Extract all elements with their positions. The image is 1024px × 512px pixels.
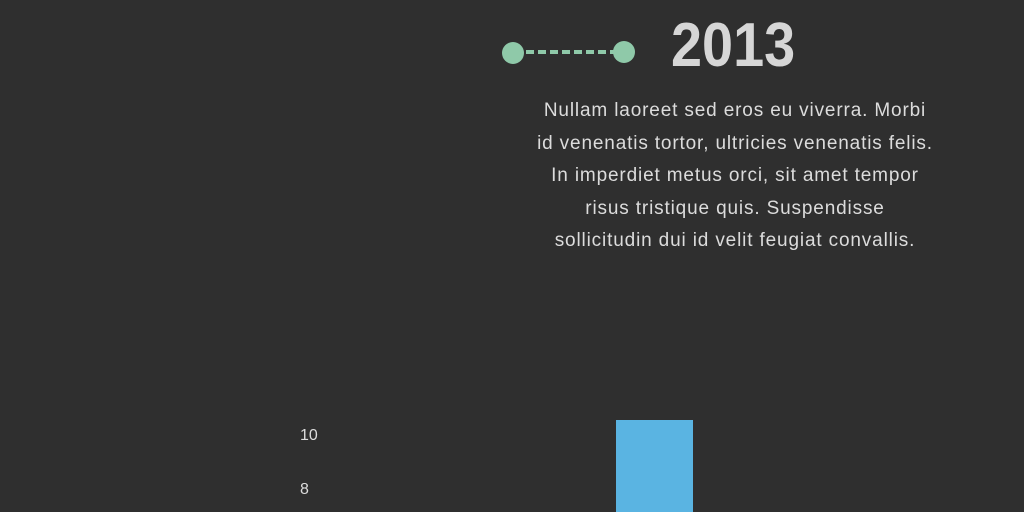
description text: id venenatis tortor, ultricies venenatis felis. bbox=[537, 132, 933, 154]
connector icon: dots with dashed line bbox=[502, 41, 635, 64]
chart axis labels: 8 bbox=[300, 481, 309, 498]
chart axis labels bbox=[300, 427, 318, 498]
description text: In imperdiet metus orci, sit amet tempor bbox=[551, 165, 919, 186]
year heading: 2013 bbox=[671, 11, 795, 80]
bar chart bar bbox=[616, 420, 693, 512]
description text: Nullam laoreet sed eros eu viverra. Morbi bbox=[544, 100, 926, 121]
description text bbox=[537, 100, 933, 251]
description text: risus tristique quis. Suspendisse bbox=[585, 198, 885, 218]
description text: sollicitudin dui id velit feugiat convallis. bbox=[555, 230, 915, 251]
chart axis labels: 10 bbox=[300, 427, 318, 444]
